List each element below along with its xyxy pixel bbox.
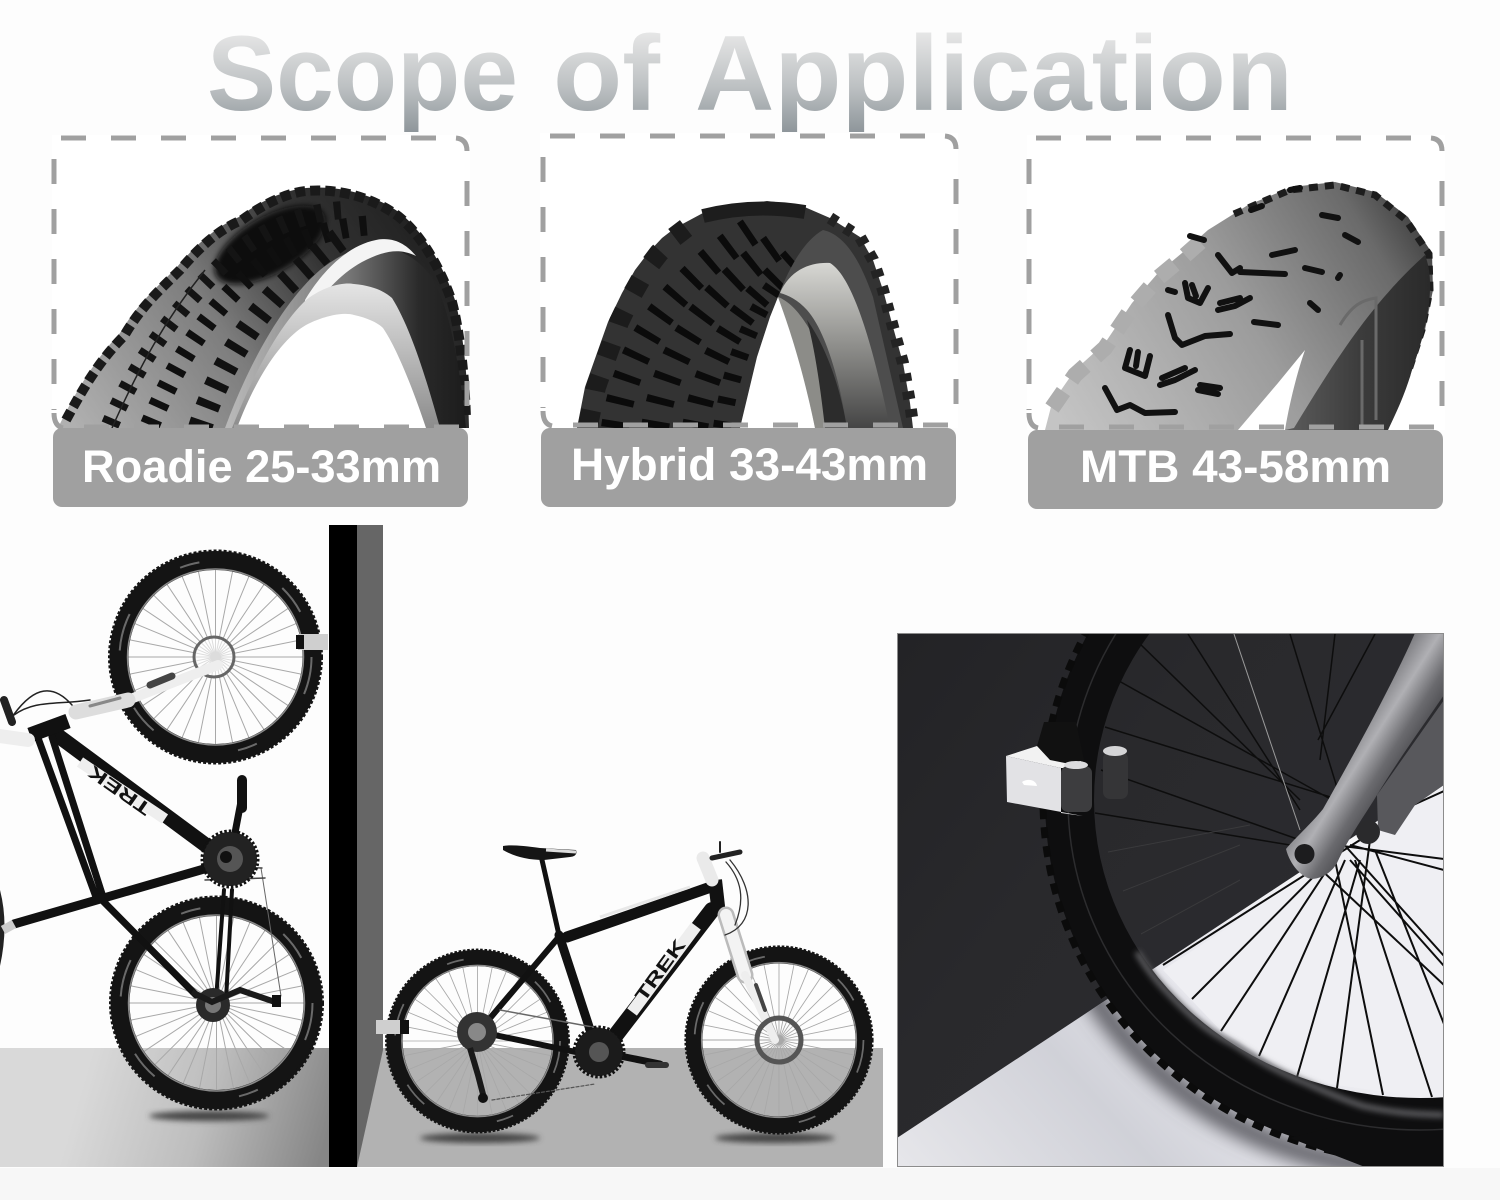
wall clamp	[296, 634, 328, 650]
upper wheel	[110, 552, 321, 762]
top tube and downtube decals	[600, 887, 696, 1012]
wall	[897, 633, 1444, 1167]
label text: Roadie 25-33mm	[82, 441, 441, 492]
left floor	[0, 1048, 329, 1167]
label box	[541, 428, 956, 507]
lower tyre continuation	[1298, 1139, 1443, 1166]
label: roadie	[53, 428, 468, 507]
axle bolt	[1294, 844, 1314, 864]
panel: hybrid tyre	[540, 133, 958, 428]
white panel background	[540, 133, 958, 428]
label: hybrid	[541, 428, 956, 507]
white light inside wheel	[1164, 787, 1443, 1038]
wall front face	[329, 525, 357, 1167]
hub	[1356, 822, 1380, 844]
white suspension fork	[726, 915, 775, 1040]
tyre shadow on floor	[1080, 999, 1362, 1166]
rear cassette and derailleur	[192, 988, 281, 1022]
floor shadows	[149, 1111, 835, 1143]
handlebar and stem	[703, 842, 748, 935]
frame tubes	[14, 721, 281, 1000]
panel: roadie tyre	[52, 135, 470, 428]
hung bicycle	[0, 552, 328, 1108]
chainring	[202, 831, 258, 887]
frame tubes	[480, 860, 719, 1100]
spokes	[1095, 634, 1444, 1097]
rear wheel	[387, 950, 568, 1132]
panel: close-up of wheel in clamp	[897, 633, 1444, 1167]
label text: Hybrid 33-43mm	[571, 439, 928, 490]
top tube and downtube decals: TREK	[631, 935, 690, 1005]
rear cassette and derailleur	[457, 1012, 497, 1103]
title: Scope	[207, 13, 518, 133]
downtube decal	[80, 762, 165, 819]
hybrid tyre photo	[577, 201, 913, 428]
title	[207, 13, 1293, 133]
floor	[897, 777, 1444, 1167]
right floor	[357, 1048, 883, 1167]
upper brake disc	[194, 637, 234, 677]
title: Application	[695, 13, 1293, 133]
dashed frame	[543, 136, 956, 426]
front wheel	[686, 947, 872, 1133]
lower strip	[0, 1168, 1500, 1200]
roadie tyre photo	[58, 187, 469, 428]
front brake disc	[757, 1018, 801, 1062]
tread knobs	[1040, 634, 1334, 1156]
tyre and rim	[1046, 634, 1443, 1137]
saddle	[503, 845, 576, 860]
label: MTB	[1028, 430, 1443, 509]
photo border	[898, 634, 1444, 1166]
white suspension fork	[0, 665, 218, 740]
dashed frame	[54, 138, 467, 428]
white panel background	[1027, 135, 1445, 430]
lower wheel	[111, 898, 322, 1108]
second fork blade	[1377, 700, 1444, 835]
white panel background	[52, 135, 470, 428]
scene: bike hung on wall and bike parked	[0, 525, 883, 1167]
label box	[1028, 430, 1443, 509]
label box	[53, 428, 468, 507]
rim highlight	[1137, 952, 1444, 1115]
wheel clamp	[1006, 722, 1128, 816]
wall clamp	[376, 1020, 409, 1034]
saddle and seatpost	[0, 890, 14, 966]
wall side face	[357, 525, 383, 1167]
dashed frame	[1029, 138, 1442, 428]
MTB tyre photo	[1045, 182, 1433, 430]
chainring	[574, 1027, 624, 1077]
sidewall line	[1068, 634, 1443, 1131]
title: of	[553, 13, 660, 133]
panel: MTB tyre	[1027, 135, 1445, 430]
downtube decal: TREK	[84, 762, 155, 819]
parked bicycle	[376, 842, 872, 1133]
label text: MTB 43-58mm	[1080, 441, 1391, 492]
fork blade	[1286, 633, 1444, 879]
